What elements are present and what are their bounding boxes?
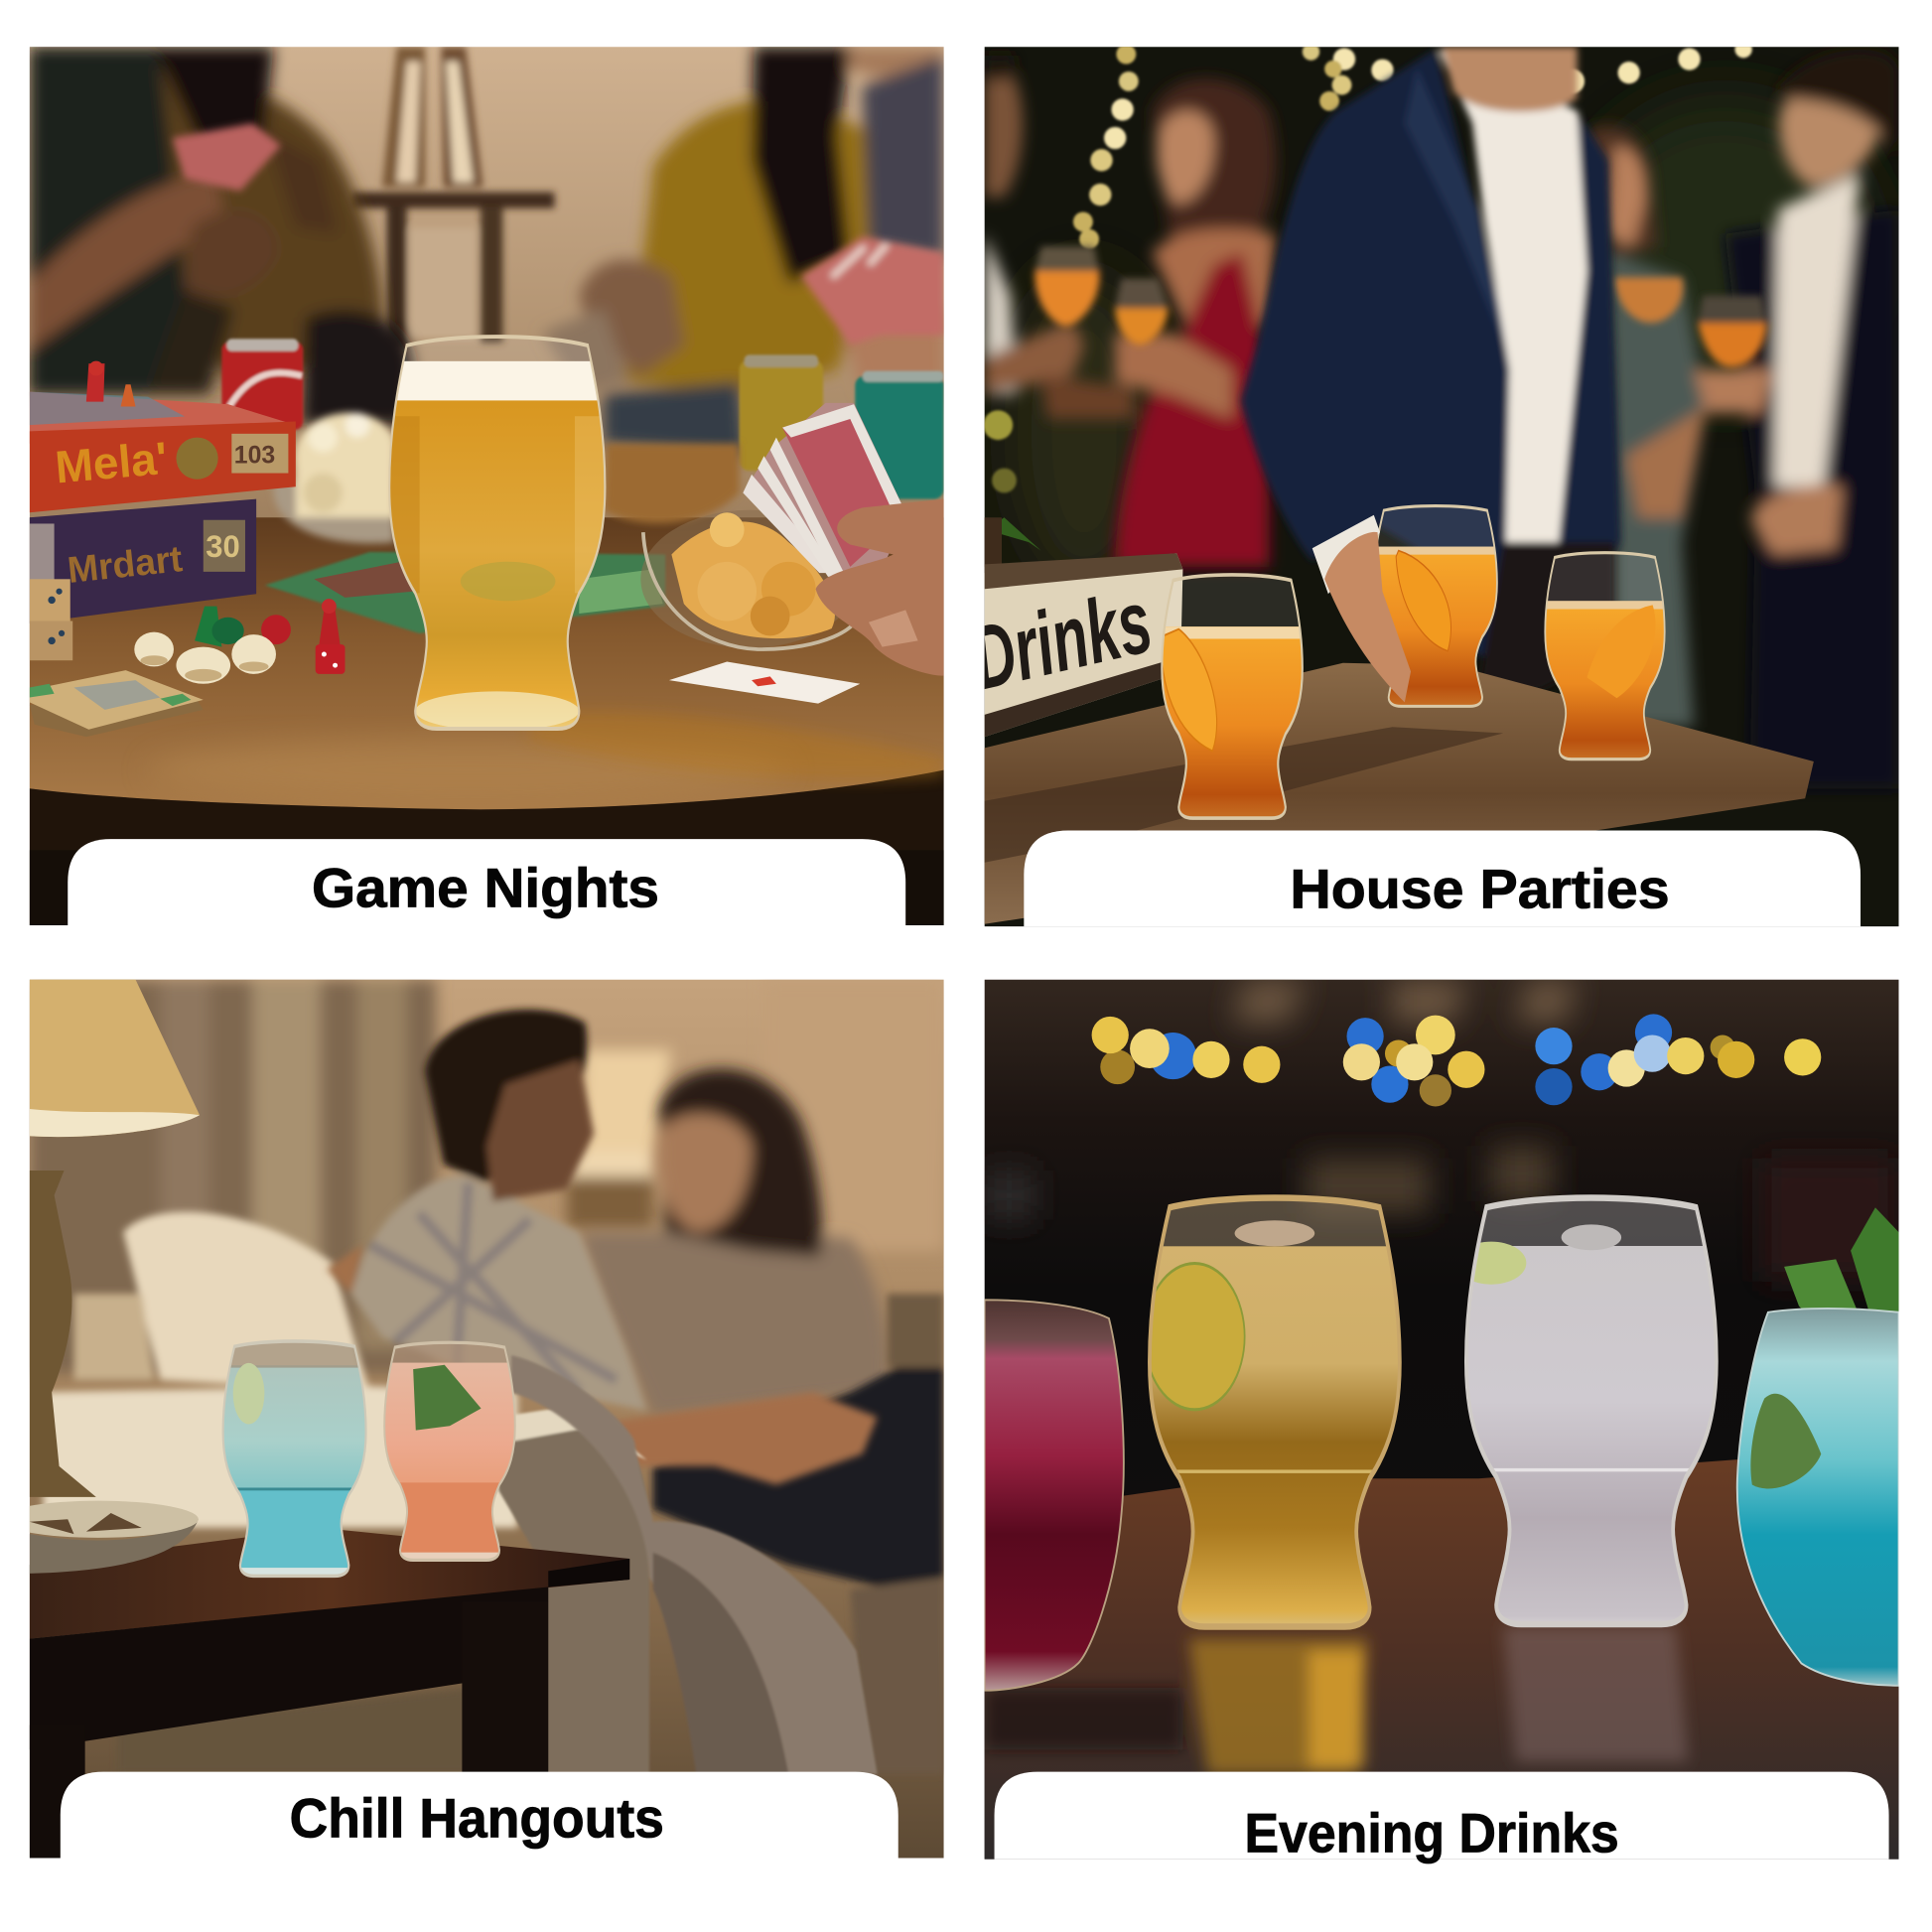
teal drink glass [1737, 1309, 1898, 1686]
panel: Game Nights [30, 47, 944, 925]
background cocktail glasses [1035, 246, 1767, 367]
purple game box [30, 499, 256, 623]
red game box: Mela' [53, 432, 170, 492]
table surface [985, 1448, 1898, 1860]
purple game box: Mrdart [66, 537, 185, 591]
mint sprig [1784, 1207, 1898, 1349]
Drinks sign [963, 553, 1182, 737]
wood table [985, 663, 1814, 924]
white drink glass [1456, 1190, 1722, 1635]
dark side table [30, 1528, 629, 1859]
blurred players in background [30, 47, 944, 456]
Drinks sign: Drinks [963, 571, 1161, 709]
label tab: Chill Hangouts: Chill Hangouts [290, 1786, 664, 1849]
label tab: Game Nights [68, 839, 905, 925]
label tab: Evening Drinks [995, 1772, 1889, 1863]
popcorn bowl [274, 413, 394, 543]
blurred lamp and side table [351, 47, 554, 348]
orange drink glass left [1160, 571, 1306, 824]
gold drink glass [1145, 1190, 1405, 1637]
stack of game cards [30, 670, 204, 737]
label tab: House Parties: House Parties [1290, 858, 1670, 920]
sofa arm [498, 1405, 649, 1774]
hand with playing cards [743, 403, 944, 676]
glass bowl of chips [640, 510, 858, 649]
panel: Chill Hangouts [0, 980, 944, 1859]
jeans and sofa [43, 1212, 944, 1774]
man in navy suit [1241, 47, 1620, 690]
string lights [1073, 41, 1752, 249]
warm wall [30, 980, 944, 1859]
shadow of glass [530, 712, 944, 779]
plate with snacks [0, 1501, 199, 1574]
curtain [30, 980, 944, 1374]
bokeh lights [1092, 1014, 1821, 1106]
label tab: Evening Drinks: Evening Drinks [1244, 1801, 1619, 1863]
purple game box: 30 [206, 529, 240, 564]
man in plaid shirt [327, 1010, 878, 1484]
red game box [30, 361, 296, 512]
night background [985, 47, 1898, 926]
label tab: House Parties [1024, 830, 1861, 926]
playing card on table [669, 661, 860, 704]
blurred guests [985, 50, 1898, 788]
dice stack [30, 523, 72, 660]
glass reflections and shadows [985, 1626, 1688, 1774]
game board [265, 552, 665, 633]
red game box: 103 [234, 443, 275, 470]
dark bar background [985, 980, 1898, 1860]
red drink glass [985, 1300, 1124, 1691]
orange drink glass centre [1371, 502, 1499, 711]
wall background [30, 47, 944, 925]
label tab: Game Nights: Game Nights [312, 856, 659, 918]
background lamp [567, 1049, 671, 1228]
game pieces and popcorn [134, 599, 345, 684]
orange drink glass right [1543, 549, 1667, 764]
table top [30, 517, 944, 809]
playing cards in background [173, 123, 944, 345]
drink cans [221, 339, 944, 499]
label tab: Chill Hangouts [61, 1772, 898, 1859]
panel: Evening Drinks [985, 980, 1898, 1863]
table lamp [30, 980, 200, 1497]
beer glass [385, 330, 610, 739]
panel: House Parties [963, 41, 1898, 926]
snack bowl far [604, 444, 740, 523]
hand and shirt cuff [1312, 515, 1411, 702]
pink drink glass [382, 1338, 517, 1566]
blue drink glass [220, 1337, 368, 1582]
knit blanket [511, 1355, 878, 1774]
flowers [983, 410, 1041, 567]
woman on sofa [579, 1069, 889, 1417]
under-table curtain [117, 1688, 469, 1774]
table edge [30, 770, 944, 925]
